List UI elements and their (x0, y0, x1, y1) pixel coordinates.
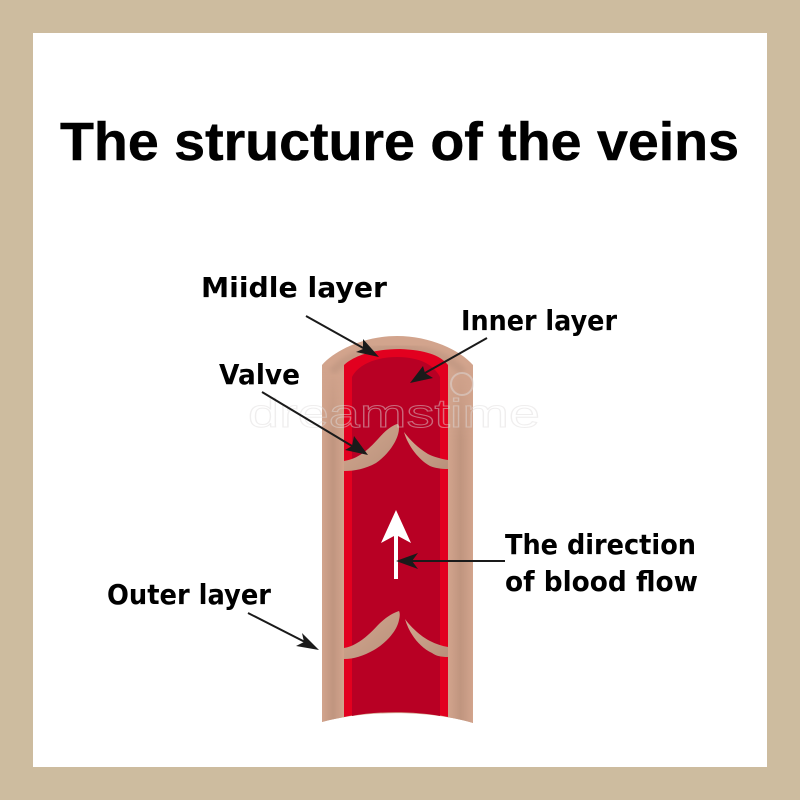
arrow: outer layer (248, 613, 319, 650)
label: direction of blood flow: The direction (505, 528, 696, 561)
arrow: direction of blood flow (396, 553, 505, 569)
middle layer (344, 349, 448, 717)
outer wall shading (322, 348, 473, 725)
arrow: valve (262, 392, 368, 455)
vein diagram (322, 336, 473, 725)
lower left valve (344, 611, 400, 659)
inner layer (352, 357, 440, 716)
label: direction of blood flow (505, 528, 698, 598)
outer layer wall (322, 336, 473, 723)
blood flow arrow (381, 510, 411, 579)
watermark (248, 373, 540, 436)
label: direction of blood flow: of blood flow (505, 565, 698, 598)
lower right valve (405, 619, 448, 657)
arrow: middle layer (306, 316, 379, 357)
upper right valve (404, 432, 448, 469)
label: inner layer: Inner layer (461, 304, 617, 337)
upper left valve (344, 424, 399, 471)
watermark: dreamstime (248, 392, 540, 436)
label: middle layer: Miidle layer (201, 271, 387, 304)
label: valve: Valve (219, 358, 300, 391)
label: outer layer: Outer layer (107, 578, 271, 611)
title: The structure of the veins (60, 112, 739, 172)
arrow: inner layer (410, 338, 487, 383)
